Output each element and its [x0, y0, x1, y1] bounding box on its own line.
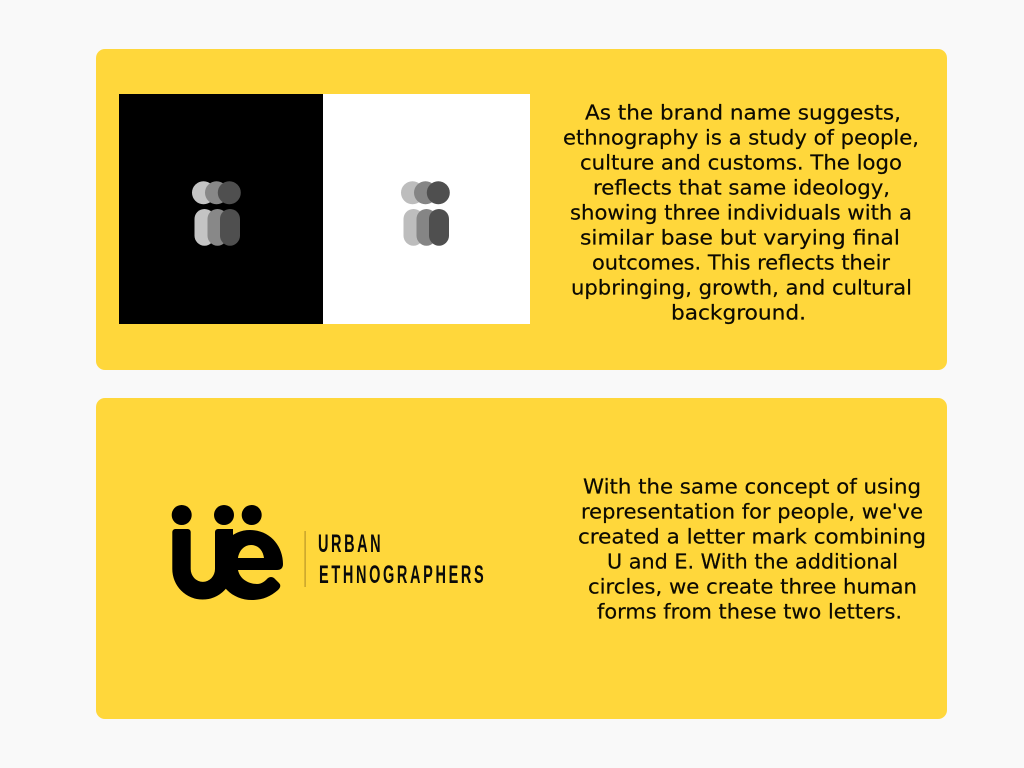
text block: brand description: ethnography is a study of people,: [563, 126, 919, 150]
text block: brand description: showing three individuals with a: [570, 200, 912, 224]
text block: letter mark description: With the same concept of using: [583, 474, 921, 498]
text block: brand description: [563, 100, 919, 324]
wordmark: URBAN: [318, 531, 381, 558]
text block: brand description: similar base but varying final: [580, 226, 900, 250]
wordmark: [318, 531, 484, 589]
logo on white background: [323, 94, 530, 324]
panel: letter mark: [96, 398, 947, 719]
text block: letter mark description: forms from these two letters.: [597, 600, 902, 624]
divider: [304, 531, 306, 587]
text block: brand description: culture and customs. The logo: [580, 150, 902, 174]
wordmark: ETHNOGRAPHERS: [319, 562, 484, 589]
text block: brand description: outcomes. This reflects their: [592, 250, 891, 274]
text block: brand description: upbringing, growth, and cultural: [571, 276, 912, 300]
text block: letter mark description: created a letter mark combining: [578, 524, 926, 548]
icon: UE letter mark: [172, 505, 283, 600]
text block: letter mark description: representation for people, we've: [581, 500, 923, 524]
text block: brand description: As the brand name suggests,: [585, 100, 901, 124]
text block: brand description: reflects that same ideology,: [593, 176, 890, 200]
text block: letter mark description: [578, 474, 926, 624]
logo on black background: [119, 94, 323, 324]
panel: logo concept: [96, 49, 947, 370]
text block: letter mark description: U and E. With the additional: [607, 550, 898, 574]
text block: brand description: background.: [671, 300, 806, 324]
text block: letter mark description: circles, we create three human: [588, 574, 917, 598]
